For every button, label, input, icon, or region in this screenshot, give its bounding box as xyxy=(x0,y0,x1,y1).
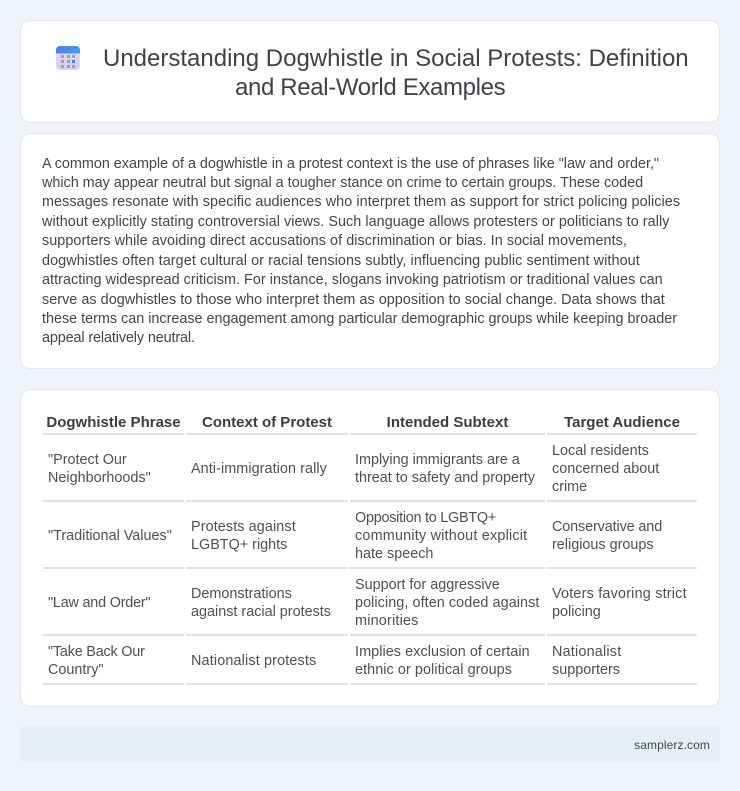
table row 3: Voters favoring strict xyxy=(552,586,687,602)
table row 3: Demonstrations xyxy=(191,586,292,602)
table row 4: ethnic or political groups xyxy=(355,662,512,678)
table row 2 xyxy=(48,510,662,562)
table row 4: "Take Back Our xyxy=(48,644,145,660)
panel: table card xyxy=(20,389,720,707)
table row 2: religious groups xyxy=(552,537,654,553)
table row 1: "Protect Our xyxy=(48,452,127,468)
table header row: Target Audience xyxy=(564,414,680,430)
table row 3 xyxy=(48,577,687,629)
text block: description: A common example of a dogwhistle in a protest context is the use of phrases like "law and order," xyxy=(42,156,659,172)
table row 1 xyxy=(48,443,660,495)
table row 3: "Law and Order" xyxy=(48,595,150,611)
table row 4: Nationalist protests xyxy=(191,653,316,669)
table header row: Intended Subtext xyxy=(387,414,508,430)
panel: description card xyxy=(20,133,720,369)
table row 4 xyxy=(48,644,622,678)
text block: description: attracting widespread criticism. For instance, slogans invoking patriotism or traditional values can xyxy=(42,272,663,288)
table header row: Dogwhistle Phrase xyxy=(46,414,181,430)
table row 2: community without explicit xyxy=(355,528,527,544)
table row 2: Protests against xyxy=(191,519,296,535)
text block: description: messages resonate with specific audiences who interpret them as support for strict policing policies xyxy=(42,194,680,210)
table row 4: Nationalist xyxy=(552,644,621,660)
table row 1: Neighborhoods" xyxy=(48,470,151,486)
title: and Real-World Examples xyxy=(235,74,505,101)
table row 1: crime xyxy=(552,479,587,495)
title xyxy=(103,45,689,101)
table row 2: hate speech xyxy=(355,546,433,562)
panel: title card xyxy=(20,20,720,123)
text block: description: serve as dogwhistles to those who interpret them as opposition to social change. Data shows that xyxy=(42,292,665,308)
title: Understanding Dogwhistle in Social Protests: Definition xyxy=(103,45,689,72)
table row 3: Support for aggressive xyxy=(355,577,500,593)
table header row xyxy=(46,414,680,430)
table row 2: Opposition to LGBTQ+ xyxy=(355,510,496,526)
table row 4: Country" xyxy=(48,662,104,678)
table row 3: policing, often coded against xyxy=(355,595,539,611)
text block: description: which may appear neutral but signal a tougher stance on crime to certain groups. These coded xyxy=(42,175,643,191)
table row 1: Anti-immigration rally xyxy=(191,461,327,477)
text block: description: supporters while avoiding direct accusations of discrimination or bias. In social movements, xyxy=(42,233,627,249)
table row 2: Conservative and xyxy=(552,519,662,535)
table row 3: against racial protests xyxy=(191,604,331,620)
text block: description: these terms can increase engagement among particular demographic groups while keeping broader xyxy=(42,311,677,327)
text block: description: dogwhistles often target cultural or racial tensions subtly, influencing public sentiment without xyxy=(42,253,640,269)
table row 2: "Traditional Values" xyxy=(48,528,172,544)
footer text: samplerz.com xyxy=(634,738,710,752)
table row 4: Implies exclusion of certain xyxy=(355,644,530,660)
table row 1: Implying immigrants are a xyxy=(355,452,520,468)
table row 1: concerned about xyxy=(552,461,659,477)
icon: calendar xyxy=(56,46,80,70)
table row 3: minorities xyxy=(355,613,419,629)
table row 1: threat to safety and property xyxy=(355,470,535,486)
table row 1: Local residents xyxy=(552,443,649,459)
table xyxy=(43,414,697,685)
text block: description xyxy=(42,156,680,346)
text block: description: without explicitly stating controversial views. Such language allows protesters or politicians to rally xyxy=(42,214,669,230)
text block: description: appeal relatively neutral. xyxy=(42,330,195,346)
table header row: Context of Protest xyxy=(202,414,332,430)
table row 2: LGBTQ+ rights xyxy=(191,537,287,553)
table row 3: policing xyxy=(552,604,601,620)
footer bar xyxy=(20,727,720,761)
table row 4: supporters xyxy=(552,662,620,678)
